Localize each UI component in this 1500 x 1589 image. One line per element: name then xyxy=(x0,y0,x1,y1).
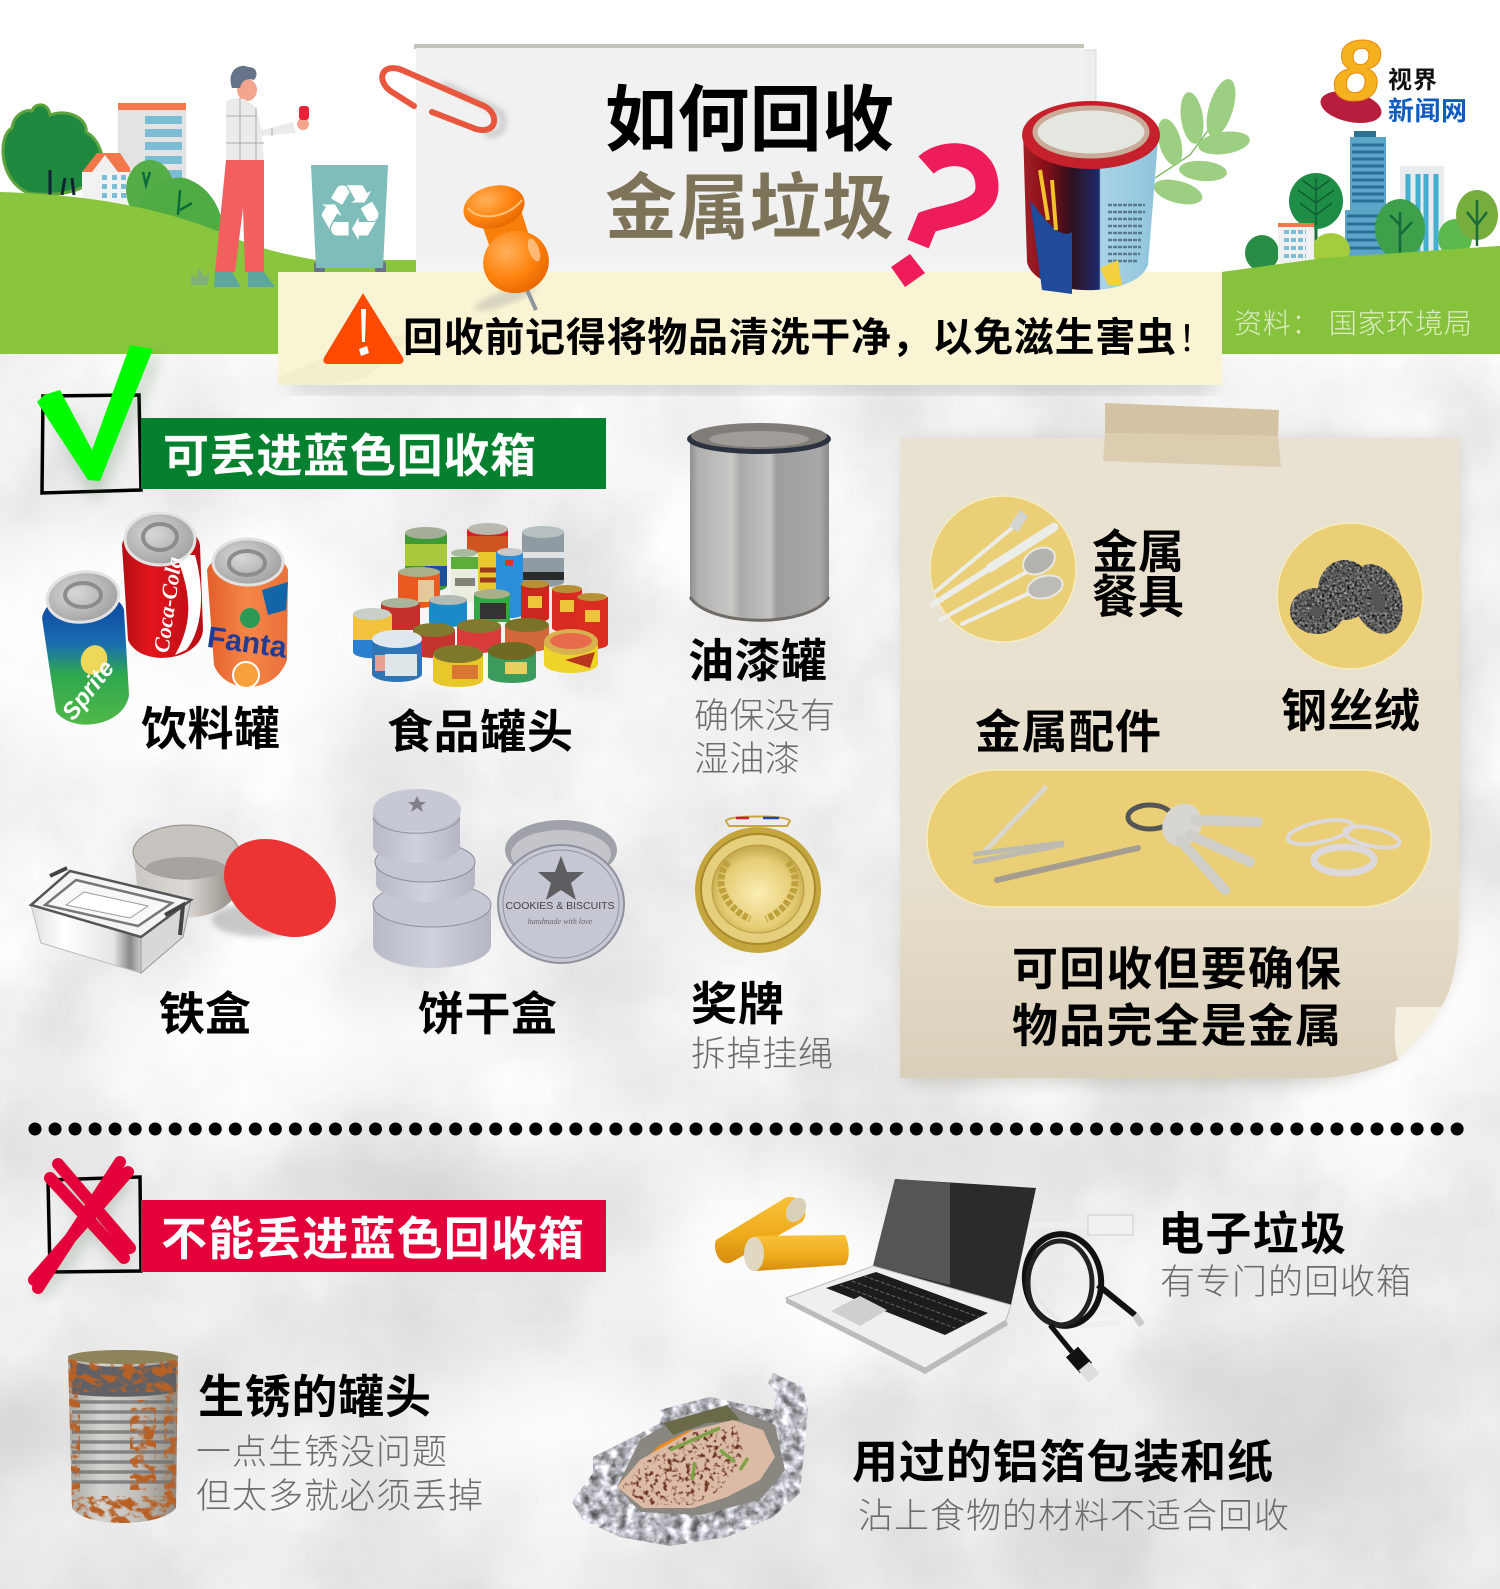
cables xyxy=(1019,1215,1142,1378)
number 8: 8 xyxy=(1333,23,1381,119)
steel box xyxy=(31,868,191,973)
right green hill xyxy=(1222,246,1500,354)
panel caption xyxy=(1012,943,1341,1052)
food cans label: 食品罐头 xyxy=(387,706,573,758)
wordmark: 视界 xyxy=(1388,67,1437,94)
tin lid: handmade with love xyxy=(528,917,593,926)
red banner xyxy=(141,1200,606,1272)
green section box and check xyxy=(37,345,155,493)
hair and head xyxy=(231,66,257,101)
logo: 8视界 新闻网 xyxy=(1318,23,1467,128)
rusty can text: 但太多就必须丢掉 xyxy=(196,1477,483,1516)
cutlery disc xyxy=(930,496,1076,642)
batteries xyxy=(715,1194,849,1271)
sweater xyxy=(226,98,296,161)
title: 如何回收 xyxy=(605,81,894,161)
medal label: 奖牌 xyxy=(691,978,784,1030)
cookie tins xyxy=(373,789,624,968)
fanta can: Fanta xyxy=(205,621,289,665)
question mark xyxy=(891,155,987,287)
electronic waste text: 电子垃圾 xyxy=(1158,1208,1346,1260)
electronic waste text: 有专门的回收箱 xyxy=(1160,1263,1411,1302)
metal parts pill xyxy=(927,770,1431,907)
tableware label: 金属 xyxy=(1092,526,1184,578)
title xyxy=(605,81,894,249)
bushes xyxy=(126,160,223,232)
leaf branch xyxy=(1151,76,1251,209)
shoes xyxy=(214,272,275,287)
nail clipper and tweezers xyxy=(975,788,1138,880)
red banner: 不能丢进蓝色回收箱 xyxy=(161,1213,584,1265)
used paint can xyxy=(1022,101,1160,294)
paint tin label: 湿油漆 xyxy=(694,740,800,779)
hand-drawn box xyxy=(42,395,141,493)
bowl xyxy=(133,825,239,918)
orange sliver xyxy=(620,1430,700,1482)
red section box and cross xyxy=(34,1162,141,1295)
panel caption: 可回收但要确保 xyxy=(1012,943,1341,995)
lunch box label: 铁盒 xyxy=(159,988,251,1040)
drink cans xyxy=(42,513,289,725)
sweater plaid xyxy=(226,98,272,161)
left green hill xyxy=(0,192,418,354)
trousers xyxy=(215,160,264,272)
foil text: 用过的铝箔包装和纸 xyxy=(852,1436,1273,1488)
leaf xyxy=(663,1405,740,1435)
trees xyxy=(1245,173,1498,271)
coke can xyxy=(122,513,203,658)
fish seasoning xyxy=(622,1425,745,1505)
medal label: 拆掉挂绳 xyxy=(691,1035,833,1074)
paperclip xyxy=(382,68,503,134)
keys xyxy=(1128,796,1258,890)
electronic waste text xyxy=(1158,1208,1411,1302)
reminder text: ！ xyxy=(1178,318,1214,359)
tableware label xyxy=(1092,526,1184,623)
medal label xyxy=(691,978,833,1074)
rusty can xyxy=(66,1350,180,1526)
herbs xyxy=(670,1428,748,1480)
foil-wrapped fish xyxy=(572,1373,808,1546)
foil text xyxy=(852,1436,1289,1536)
metal parts label: 金属配件 xyxy=(975,706,1161,758)
right scenery: city xyxy=(1222,131,1500,280)
background: crumpled paper xyxy=(0,354,1500,1589)
foil inner shadow xyxy=(617,1408,785,1515)
tableware label: 餐具 xyxy=(1092,571,1184,623)
cookie tins label: 饼干盒 xyxy=(418,988,557,1040)
steel wool label: 钢丝绒 xyxy=(1281,685,1420,737)
big tree xyxy=(3,105,102,195)
logo: 8视界 新闻网: 新闻网 xyxy=(1388,96,1467,126)
paint tin label: 确保没有 xyxy=(694,697,835,736)
medal xyxy=(695,816,821,953)
food cans pile xyxy=(353,523,608,687)
check shadow xyxy=(60,355,155,486)
house xyxy=(82,153,130,206)
coke can: Coca-Cola xyxy=(148,555,187,654)
green banner xyxy=(141,418,606,489)
laptop xyxy=(786,1179,1036,1374)
fish xyxy=(617,1420,775,1508)
recycling bin: ♻ xyxy=(315,169,385,259)
source note: 资料： 国家环境局 xyxy=(1234,308,1472,339)
tin lid: COOKIES & BISCUITS xyxy=(505,900,615,912)
lunch boxes xyxy=(31,819,354,973)
warning triangle xyxy=(324,295,402,363)
hand and red can xyxy=(297,106,309,130)
paint tin label: 油漆罐 xyxy=(688,635,827,687)
red base xyxy=(1318,86,1384,128)
stack xyxy=(373,789,491,968)
panel caption: 物品完全是金属 xyxy=(1012,1000,1341,1052)
drink cans label: 饮料罐 xyxy=(141,703,280,755)
rings xyxy=(1286,815,1401,873)
green banner: 可丢进蓝色回收箱 xyxy=(163,430,536,482)
paint tin label xyxy=(688,635,835,779)
check mark xyxy=(37,345,153,481)
red lid xyxy=(206,819,354,957)
tin lid xyxy=(498,845,624,963)
title paper stack xyxy=(414,44,1096,272)
sprite can xyxy=(42,567,129,725)
open tin xyxy=(505,820,617,880)
foil text: 沾上食物的材料不适合回收 xyxy=(858,1497,1289,1536)
hill front xyxy=(1222,246,1500,280)
person holding a can xyxy=(191,66,309,287)
steel wool disc xyxy=(1277,523,1423,669)
left scenery: trees and buildings xyxy=(3,103,223,232)
rusty can text: 一点生锈没问题 xyxy=(196,1433,447,1472)
sprite can: Sprite xyxy=(57,655,120,725)
title: 金属垃圾 xyxy=(605,169,894,249)
foil wrap xyxy=(572,1373,808,1546)
small building xyxy=(1278,223,1314,263)
background: white top band xyxy=(0,0,1500,360)
small plant xyxy=(191,268,209,285)
blue tower xyxy=(1345,131,1386,260)
fanta can xyxy=(205,539,289,688)
rusty can text xyxy=(196,1371,483,1516)
tape xyxy=(1103,403,1281,467)
push pin xyxy=(459,179,556,316)
beige note panel xyxy=(900,403,1459,1084)
reminder text: 回收前记得将物品清洗干净，以免滋生害虫 xyxy=(403,316,1176,360)
building xyxy=(118,103,186,193)
pale tower xyxy=(1400,166,1444,252)
rusty can text: 生锈的罐头 xyxy=(198,1371,431,1423)
bowl shadow xyxy=(212,903,312,937)
yellow note xyxy=(278,272,1222,392)
curled corner xyxy=(1395,1007,1441,1060)
paint tin xyxy=(687,423,831,620)
